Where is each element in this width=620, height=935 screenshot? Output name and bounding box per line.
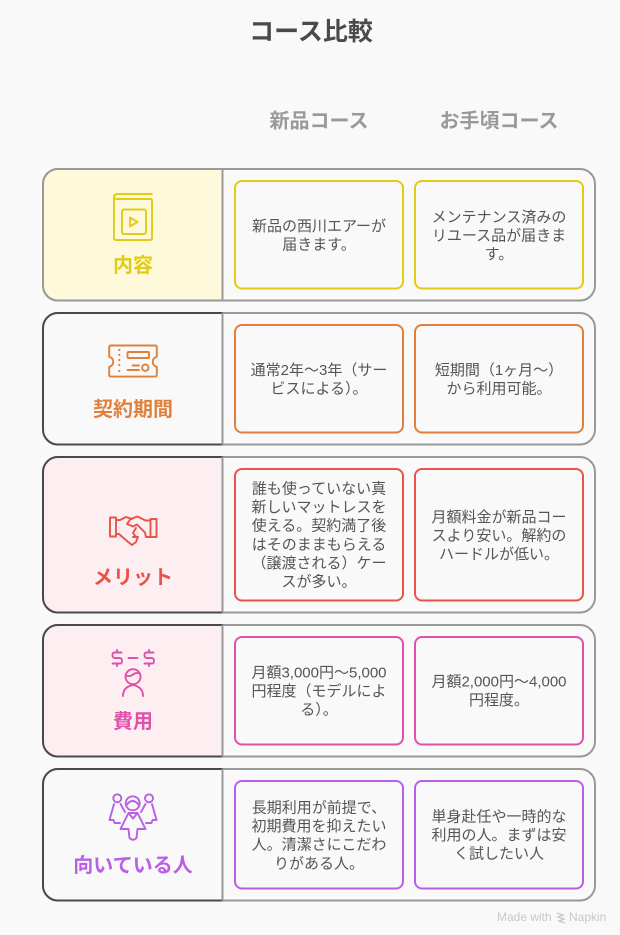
card: new course contract: [235, 325, 403, 432]
row frame: [43, 169, 595, 300]
column heading: new course: 新品コース: [270, 110, 368, 132]
card: budget course merits: [415, 469, 583, 600]
card: budget course contents: す。: [485, 246, 513, 263]
card: new course merits: 使える。契約満了後: [252, 518, 386, 535]
card: budget course suited people: 利用の人。まずは安: [431, 827, 567, 844]
icon: handshake: [110, 516, 156, 545]
card: new course contents: 新品の西川エアーが: [252, 218, 386, 235]
card: budget course contract: [415, 325, 583, 432]
card: new course suited people: 初期費用を抑えたい: [251, 818, 387, 835]
icon: napkin logo: [557, 913, 565, 923]
column heading: budget course: お手頃コース: [440, 110, 558, 132]
card: new course suited people: [235, 781, 403, 888]
label panel: [43, 169, 222, 300]
label: メリット: [93, 567, 173, 589]
card: budget course suited people: 単身赴任や一時的な: [431, 808, 567, 826]
row frame: [43, 769, 595, 900]
label: 内容: [113, 254, 153, 277]
title: コース比較: [249, 18, 373, 46]
label panel: [43, 769, 222, 900]
watermark: [497, 910, 606, 924]
card: new course cost: [235, 637, 403, 744]
card: new course contract: ビスによる）。: [270, 381, 368, 398]
label: 契約期間: [93, 398, 173, 421]
card: new course cost: る）。: [300, 702, 338, 719]
card: new course cost: 月額3,000円～5,000: [251, 664, 387, 682]
card: new course contents: [235, 181, 403, 288]
icon: book with play button: [114, 194, 152, 240]
label: 費用: [113, 710, 153, 733]
card: budget course suited people: [415, 781, 583, 888]
card: new course suited people: 人。清潔さにこだわ: [252, 837, 386, 854]
card: budget course contents: [415, 181, 583, 288]
card: new course merits: （譲渡される）ケー: [251, 555, 387, 572]
card: budget course cost: 円程度。: [469, 692, 529, 709]
row: merits: [43, 457, 595, 612]
card: budget course contents: メンテナンス済みの: [432, 209, 566, 226]
card: new course contract: 通常2年～3年（サー: [251, 362, 387, 379]
row: cost: [43, 625, 595, 756]
card: budget course contract: 短期間（1ヶ月～）: [435, 362, 563, 379]
icon: group of people: [110, 794, 156, 840]
watermark: Made with: [497, 910, 552, 924]
card: new course suited people: りがある人。: [274, 855, 364, 872]
card: new course merits: [235, 469, 403, 600]
card: budget course contract: から利用可能。: [446, 381, 552, 398]
card: budget course merits: スより安い。解約の: [432, 528, 566, 545]
row frame: [43, 457, 595, 612]
card: budget course cost: 月額2,000円～4,000: [431, 674, 567, 690]
label panel: [43, 625, 222, 756]
card: new course cost: 円程度（モデルによ: [251, 682, 387, 700]
card: new course merits: 誰も使っていない真: [252, 480, 386, 498]
card: new course merits: 新しいマットレスを: [251, 499, 387, 516]
label: 向いている人: [73, 854, 193, 877]
card: new course contents: 届きます。: [282, 237, 356, 254]
card: budget course suited people: く試したい人: [454, 846, 544, 863]
card: budget course merits: 月額料金が新品コー: [431, 509, 567, 526]
watermark: Napkin: [569, 910, 606, 924]
row: contract period: [43, 313, 595, 444]
card: budget course cost: [415, 637, 583, 744]
card: new course merits: スが多い。: [281, 572, 357, 590]
card: new course suited people: 長期利用が前提で、: [252, 800, 386, 816]
card: budget course contents: リユース品が届きま: [432, 228, 566, 245]
row: suited people: [43, 769, 595, 900]
label panel: [43, 457, 222, 612]
card: new course merits: はそのままもらえる: [252, 536, 386, 553]
row: contents: [43, 169, 595, 300]
card: budget course merits: ハードルが低い。: [439, 546, 559, 563]
row frame: [43, 313, 595, 444]
label panel: [43, 313, 222, 444]
icon: person with dollar signs: [112, 650, 154, 696]
icon: ticket: [109, 346, 157, 377]
row frame: [43, 625, 595, 756]
